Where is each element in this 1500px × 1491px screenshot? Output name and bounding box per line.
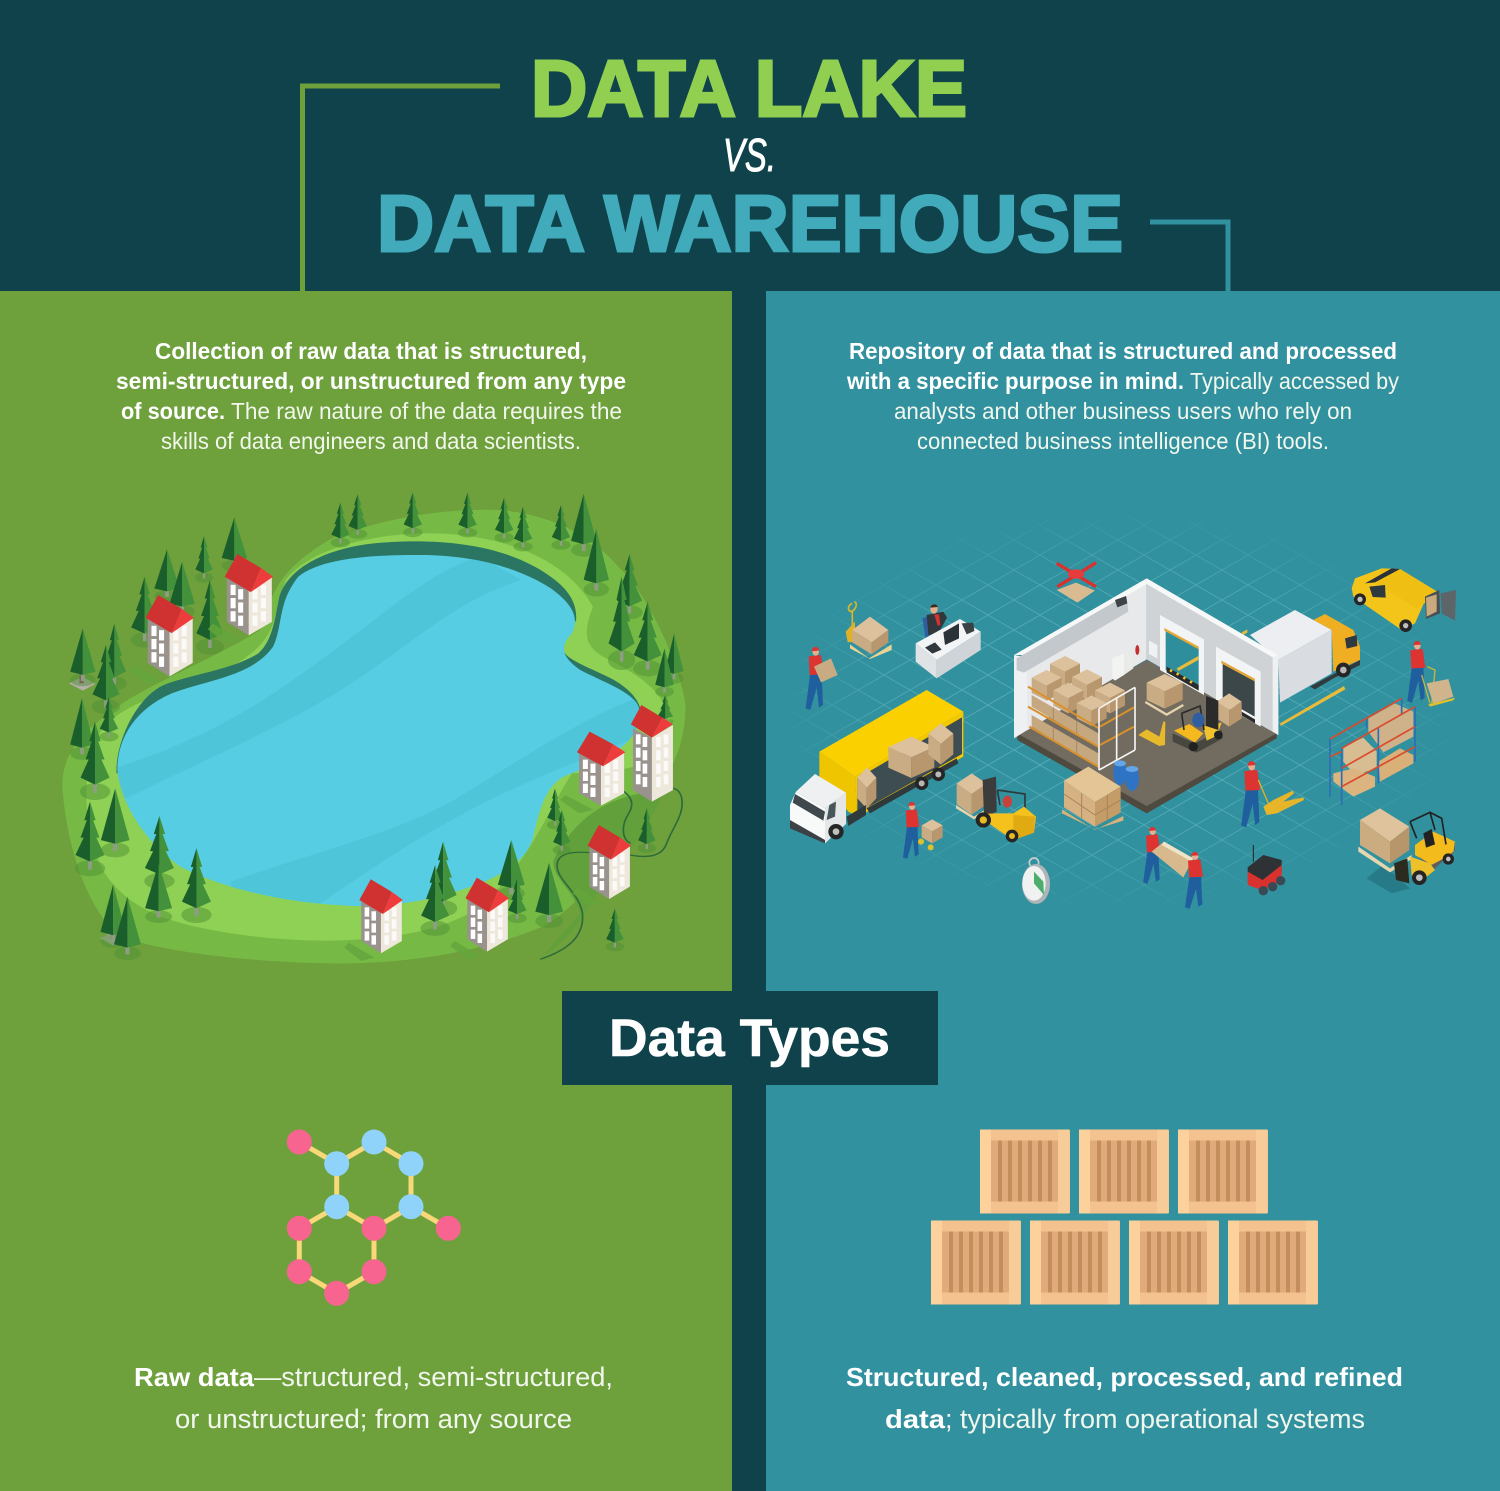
icon: molecule network xyxy=(287,1130,461,1306)
bracket: green title line xyxy=(302,86,500,291)
text block: data warehouse definition: with a specific purpose in mind. xyxy=(846,368,1184,394)
panel: data warehouse background xyxy=(766,291,1500,1491)
lake water xyxy=(117,555,639,906)
lake bank xyxy=(116,541,641,780)
forklift with boxes xyxy=(956,773,1036,842)
illustration: lake with trees and buildings xyxy=(62,492,686,963)
worker with pallet jack xyxy=(1241,761,1304,827)
text block: data lake definition: Collection of raw data that is structured, xyxy=(155,338,587,364)
text block: data warehouse definition: analysts and other business users who rely on xyxy=(894,398,1352,424)
text block: data warehouse definition: connected business intelligence (BI) tools. xyxy=(917,428,1329,454)
text block: data lake definition: of source. xyxy=(121,398,225,424)
lake ground: lighter ring xyxy=(86,533,673,941)
pallet jack with boxes xyxy=(846,602,892,659)
floor grid behind warehouse xyxy=(802,524,1438,896)
pallet rack xyxy=(1330,698,1415,805)
worker carrying box xyxy=(806,647,838,710)
text block: raw data description xyxy=(134,1362,613,1434)
text block: data lake definition xyxy=(116,338,626,454)
illustration: warehouse with logistics scene xyxy=(790,563,1456,909)
title: DATA WAREHOUSE xyxy=(377,179,1123,268)
pallet of boxes inside xyxy=(1145,674,1183,715)
data types heading: Data Types xyxy=(609,1009,890,1068)
stacked pallet boxes xyxy=(1062,767,1123,830)
text block: raw data description: Raw data xyxy=(134,1362,255,1392)
trees xyxy=(70,492,683,960)
forklift inside xyxy=(1173,693,1242,753)
text block: data lake definition: The raw nature of the data requires the xyxy=(231,398,622,424)
title: VS. xyxy=(723,129,776,181)
panel: data lake background xyxy=(0,291,732,1491)
text block: structured data description: ; typically from operational systems xyxy=(945,1404,1365,1434)
delivery robot xyxy=(1248,845,1285,895)
shelves of boxes xyxy=(1028,656,1135,770)
blue barrels xyxy=(1113,760,1139,791)
text block: data warehouse definition: Typically accessed by xyxy=(1190,368,1399,394)
text block: data warehouse definition xyxy=(846,338,1399,454)
text block: structured data description: Structured, cleaned, processed, and refined xyxy=(846,1362,1403,1392)
trailer truck xyxy=(790,690,963,843)
rear delivery truck xyxy=(1242,610,1360,726)
two workers carrying large box xyxy=(1143,827,1203,909)
worker with hand truck xyxy=(903,802,943,859)
text block: data lake definition: skills of data engineers and data scientists. xyxy=(161,428,581,454)
warehouse building centre xyxy=(1014,563,1360,830)
lake ground: outer medium green xyxy=(62,510,686,963)
text block: structured data description: data xyxy=(885,1404,946,1434)
bracket: teal title line xyxy=(1150,222,1228,291)
title: DATA LAKE xyxy=(531,44,967,133)
signs xyxy=(69,673,125,946)
buildings xyxy=(129,554,673,961)
warehouse right wall xyxy=(1147,578,1278,735)
forklift with pallet xyxy=(1358,808,1455,893)
lake streaks xyxy=(109,557,648,910)
text block: data lake definition: semi-structured, or unstructured from any type xyxy=(116,368,626,394)
receptionist and desk xyxy=(916,604,981,678)
warehouse floor xyxy=(1017,660,1277,813)
text block: data warehouse definition: Repository of data that is structured and processed xyxy=(849,338,1397,364)
electrical panels xyxy=(1112,641,1157,681)
people, hand truck, stopwatch and robot along the bottom xyxy=(903,802,1285,909)
text block: structured data description xyxy=(846,1362,1403,1434)
items right xyxy=(1330,568,1456,893)
dark ground patch lower right xyxy=(542,787,669,957)
icon: stacked crates xyxy=(931,1130,1318,1304)
worker with hand truck xyxy=(1407,641,1455,707)
trailer truck and forklift xyxy=(790,690,1036,843)
stopwatch xyxy=(1022,858,1050,904)
text block: raw data description: or unstructured; from any source xyxy=(175,1404,572,1434)
title xyxy=(377,44,1123,268)
loading doors xyxy=(1160,615,1261,727)
yellow van xyxy=(1352,568,1456,632)
winding paths xyxy=(540,788,682,959)
warehouse left wall xyxy=(1014,578,1147,738)
data types heading box xyxy=(562,991,938,1085)
pallet jack inside xyxy=(1138,722,1165,746)
text block: raw data description: —structured, semi-structured, xyxy=(254,1362,613,1392)
drone xyxy=(1057,563,1096,603)
items upper left xyxy=(806,602,981,710)
